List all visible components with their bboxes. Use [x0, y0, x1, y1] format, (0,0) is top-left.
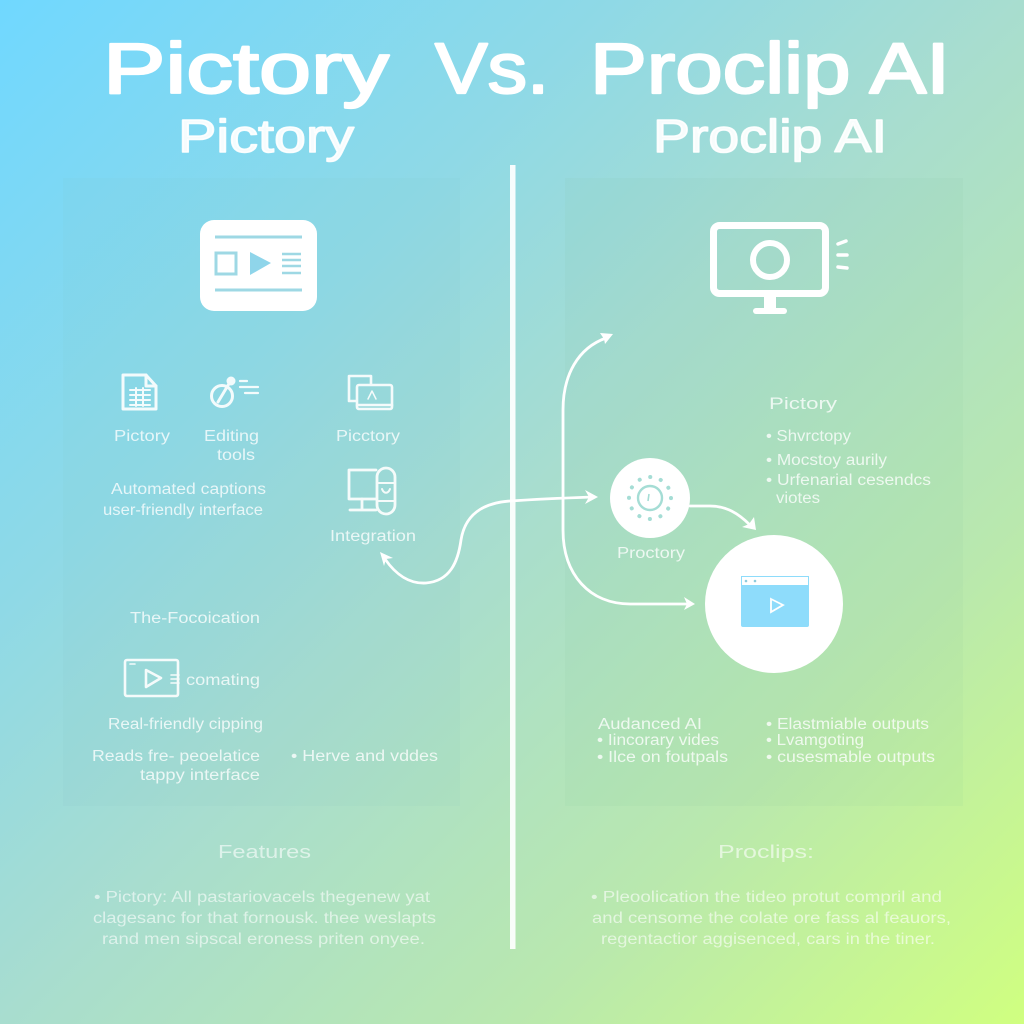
label: comating: comating [186, 672, 260, 689]
icon: monitor and phone [349, 468, 395, 514]
text: outputs list [766, 716, 935, 766]
label: Editing tools [204, 428, 259, 464]
text: The-Focoication: The-Focoication [130, 610, 260, 627]
text: Proclips description [591, 889, 951, 948]
icon: overlapping windows [349, 376, 392, 409]
icon: circle with dotted dial [610, 458, 690, 538]
text: herve and vddes: • Herve and vddes [291, 748, 438, 765]
text: advanced AI list: • Iincorary vides [597, 732, 719, 749]
icon: video window [125, 660, 179, 696]
center divider [510, 165, 516, 949]
arrow: circle to window [690, 506, 756, 530]
heading: Pictory: Pictory [178, 110, 354, 162]
title: Pictory [103, 30, 390, 109]
text: automated captions: Automated captions [111, 481, 266, 498]
heading: Proclips: Proclips: [718, 842, 814, 862]
icon: editing tool [212, 378, 258, 406]
label: Pictory: Pictory [114, 428, 170, 445]
text: Pictory list: Pictory [769, 394, 838, 413]
icon: monitor with circle [714, 226, 847, 314]
label: Editing tools: tools [217, 447, 255, 464]
arrow: looping bracket [563, 333, 695, 610]
text: Proclips description: • Pleoolication the tideo protut compril and [591, 889, 942, 906]
text: outputs list: • Elastmiable outputs [766, 716, 929, 733]
label: Proctory: Proctory [617, 545, 685, 562]
panel: Pictory [63, 178, 460, 806]
text: real-friendly clipping: Real-friendly cipping [108, 716, 263, 733]
text: Pictory list: • Shvrctopy [766, 428, 851, 445]
text: Pictory features description: clagesanc for that fornousk. thee weslapts [93, 910, 436, 927]
title [103, 30, 950, 109]
label: Editing tools: Editing [204, 428, 259, 445]
heading: Proclip AI: Proclip AI [653, 110, 887, 162]
heading: Features: Features [218, 842, 311, 862]
arrow: integration to center circle [380, 490, 598, 583]
text: reads free: Reads fre- peoelatice [92, 748, 260, 765]
text: outputs list: • cusesmable outputs [766, 749, 935, 766]
text: Proclips description: and censome the colate ore fass al feauors, [592, 910, 951, 927]
text: Pictory list: • Mocstoy aurily [766, 452, 887, 469]
panel: Proclip AI [565, 178, 963, 806]
text: automated captions [103, 481, 266, 519]
text: Proclips description: regentactior aggisenced, cars in the tiner. [601, 931, 935, 948]
text: Pictory list [766, 394, 931, 507]
text: reads free: tappy interface [140, 767, 260, 784]
text: outputs list: • Lvamgoting [766, 732, 864, 749]
label: Integration: Integration [330, 528, 416, 545]
text: automated captions: user-friendly interface [103, 502, 263, 519]
icon: large circle with browser window [705, 535, 843, 673]
icon: document table [123, 375, 156, 409]
text: advanced AI list: • Ilce on foutpals [597, 749, 728, 766]
text: advanced AI list: Audanced AI [598, 716, 702, 733]
text: Pictory list: • Urfenarial cesendcs [766, 472, 931, 489]
label: Picctory: Picctory [336, 428, 400, 445]
text: advanced AI list [597, 716, 728, 766]
text: Pictory features description: rand men sipscal eroness priten onyee. [102, 931, 425, 948]
title: Vs. [435, 30, 549, 109]
text: Pictory list: viotes [776, 490, 820, 507]
title: Proclip AI [590, 30, 950, 109]
text: Pictory features description: • Pictory: All pastariovacels thegenew yat [94, 889, 431, 906]
text: Pictory features description [93, 889, 436, 948]
text: reads free [92, 748, 260, 784]
icon: video editor card [200, 220, 317, 311]
